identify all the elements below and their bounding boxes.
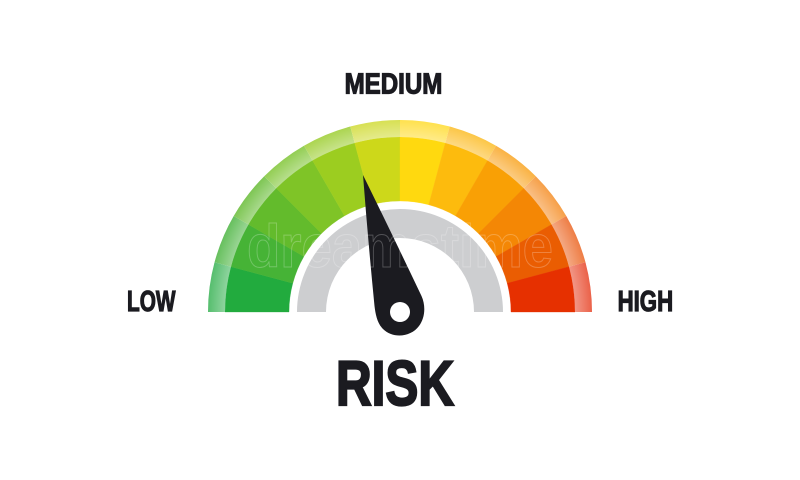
label: medium: MEDIUM xyxy=(345,68,442,100)
inner gray arc xyxy=(297,209,503,312)
title: risk: RISK xyxy=(336,349,454,419)
label: high: HIGH xyxy=(618,286,673,318)
needle xyxy=(363,175,424,335)
gauge dial: colored segments xyxy=(225,131,581,328)
gauge dial: light outer rim xyxy=(208,114,598,316)
label: low: LOW xyxy=(127,286,176,318)
watermark: dreamstime xyxy=(247,213,553,280)
